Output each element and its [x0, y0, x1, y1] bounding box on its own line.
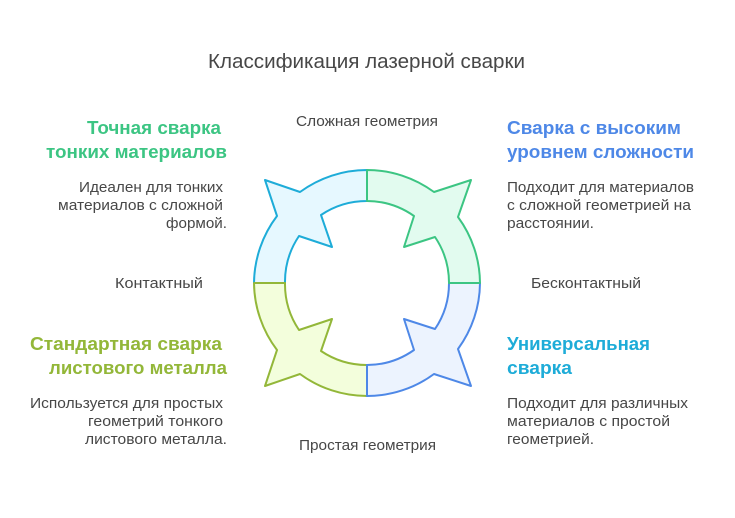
- panel: bottom left: [30, 333, 228, 448]
- text block: bottom left: [30, 396, 227, 448]
- axis label: left: Контактный: [115, 276, 203, 292]
- heading: bottom right: Универсальная: [507, 333, 650, 354]
- text block: bottom right: геометрией.: [507, 432, 594, 448]
- heading: bottom left: [30, 333, 228, 378]
- text block: top right: с сложной геометрией на: [507, 198, 692, 214]
- panel: top left: [46, 117, 227, 232]
- cycle diagram: [254, 170, 480, 396]
- text block: bottom left: листового металла.: [85, 432, 227, 448]
- text block: top left: [58, 180, 227, 232]
- heading: bottom right: [507, 333, 650, 378]
- heading: top left: [46, 117, 227, 162]
- arrow segment: bottom left: [254, 283, 367, 396]
- axis label: top: Сложная геометрия: [296, 114, 438, 130]
- heading: bottom left: листового металла: [49, 357, 228, 378]
- axis label: right: Бесконтактный: [531, 276, 641, 292]
- text block: top right: расстоянии.: [507, 216, 594, 232]
- heading: top right: Сварка с высоким: [507, 117, 681, 138]
- text block: top right: [507, 180, 694, 232]
- arrow segment: bottom right: [367, 283, 480, 396]
- axis label: bottom: Простая геометрия: [299, 438, 436, 454]
- panel: bottom right: [507, 333, 689, 448]
- arrow segment: top right: [367, 170, 480, 283]
- text block: bottom right: [507, 396, 689, 448]
- text block: bottom left: геометрий тонкого: [88, 414, 223, 430]
- title: Классификация лазерной сварки: [208, 51, 525, 73]
- text block: top right: Подходит для материалов: [507, 180, 694, 196]
- heading: bottom left: Стандартная сварка: [30, 333, 223, 354]
- heading: top left: тонких материалов: [46, 141, 227, 162]
- heading: bottom right: сварка: [507, 357, 573, 378]
- heading: top right: [507, 117, 694, 162]
- text block: top left: Идеален для тонких: [79, 180, 224, 196]
- text block: top left: формой.: [166, 216, 227, 232]
- heading: top left: Точная сварка: [87, 117, 222, 138]
- arrow segment: top left: [254, 170, 367, 283]
- text block: bottom left: Используется для простых: [30, 396, 224, 412]
- heading: top right: уровнем сложности: [507, 141, 694, 162]
- text block: bottom right: материалов с простой: [507, 414, 670, 430]
- text block: top left: материалов с сложной: [58, 198, 223, 214]
- text block: bottom right: Подходит для различных: [507, 396, 689, 412]
- panel: top right: [507, 117, 694, 232]
